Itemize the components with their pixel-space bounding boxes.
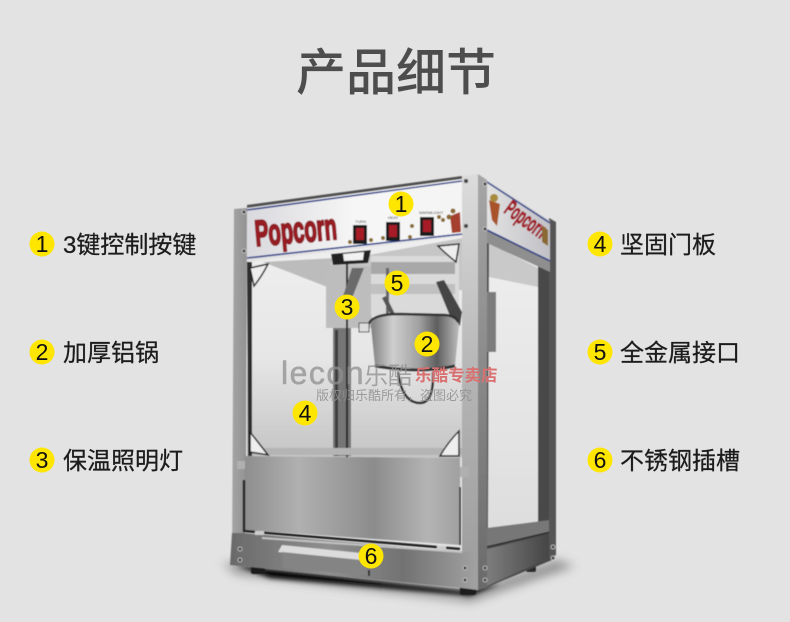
switch captions bbox=[355, 210, 444, 224]
frame screws bbox=[238, 179, 555, 582]
front glass bbox=[247, 236, 462, 458]
label 6: 6 bbox=[594, 447, 606, 473]
label 2: 加厚铝锅 bbox=[63, 340, 159, 367]
watermark bbox=[281, 355, 498, 403]
popcorn machine bbox=[222, 174, 575, 602]
label 3: 保温照明灯 bbox=[63, 448, 183, 475]
label 5: 全金属接口 bbox=[620, 340, 740, 367]
marker 4 on machine bbox=[292, 400, 318, 426]
marker 1 on machine bbox=[388, 191, 414, 217]
top trim bbox=[247, 176, 462, 208]
label 6: 不锈钢插槽 bbox=[620, 448, 740, 475]
side sign panel bbox=[487, 180, 551, 262]
marker 2 on machine bbox=[414, 331, 440, 357]
label 2: 2 bbox=[36, 339, 48, 365]
marker 1 on machine: 1 bbox=[395, 191, 407, 217]
label 1: 1 bbox=[36, 231, 48, 257]
base and drawer slot bbox=[230, 531, 478, 590]
watermark: 版权归乐酷所有，盗图必究 bbox=[316, 388, 472, 403]
front right post bbox=[462, 174, 478, 590]
floor shadow bbox=[222, 560, 575, 602]
marker 3 on machine bbox=[334, 294, 360, 320]
rocker switches bbox=[353, 217, 434, 244]
lamp holder bbox=[331, 250, 371, 265]
far right post bbox=[549, 218, 556, 558]
feet bbox=[251, 565, 265, 574]
side sign panel: Popcorn bbox=[500, 197, 551, 244]
front left post bbox=[232, 208, 247, 563]
marker 6 on machine bbox=[358, 543, 384, 569]
label 3: 3 bbox=[36, 447, 48, 473]
top control panel bbox=[247, 179, 462, 260]
label 4: 4 bbox=[594, 231, 607, 257]
popcorn logo: Popcorn bbox=[253, 206, 338, 254]
corner brackets bbox=[250, 244, 459, 456]
switch captions: HEAT bbox=[388, 215, 399, 220]
watermark: lecon bbox=[281, 355, 365, 391]
label 4: 坚固门板 bbox=[620, 232, 716, 259]
title: 产品细节 bbox=[296, 45, 496, 101]
switch captions: WARMLIGHT bbox=[419, 210, 444, 215]
side glass bbox=[480, 222, 556, 590]
marker 5 on machine bbox=[384, 270, 410, 296]
lower steel door bbox=[245, 456, 460, 545]
marker 4 on machine: 4 bbox=[299, 400, 312, 426]
kettle bbox=[340, 268, 462, 403]
marker 5 on machine: 5 bbox=[391, 270, 403, 296]
popcorn graphic bbox=[348, 208, 461, 244]
marker 6 on machine: 6 bbox=[365, 543, 377, 569]
label 5: 5 bbox=[594, 339, 606, 365]
switch captions: TURN bbox=[355, 219, 366, 224]
label 1: 3键控制按键 bbox=[63, 232, 196, 259]
side lower sill bbox=[487, 231, 550, 272]
watermark: 乐酷 bbox=[364, 363, 412, 390]
marker 3 on machine: 3 bbox=[341, 294, 353, 320]
marker 2 on machine: 2 bbox=[421, 331, 433, 357]
watermark: 乐酷专卖店 bbox=[415, 366, 498, 385]
